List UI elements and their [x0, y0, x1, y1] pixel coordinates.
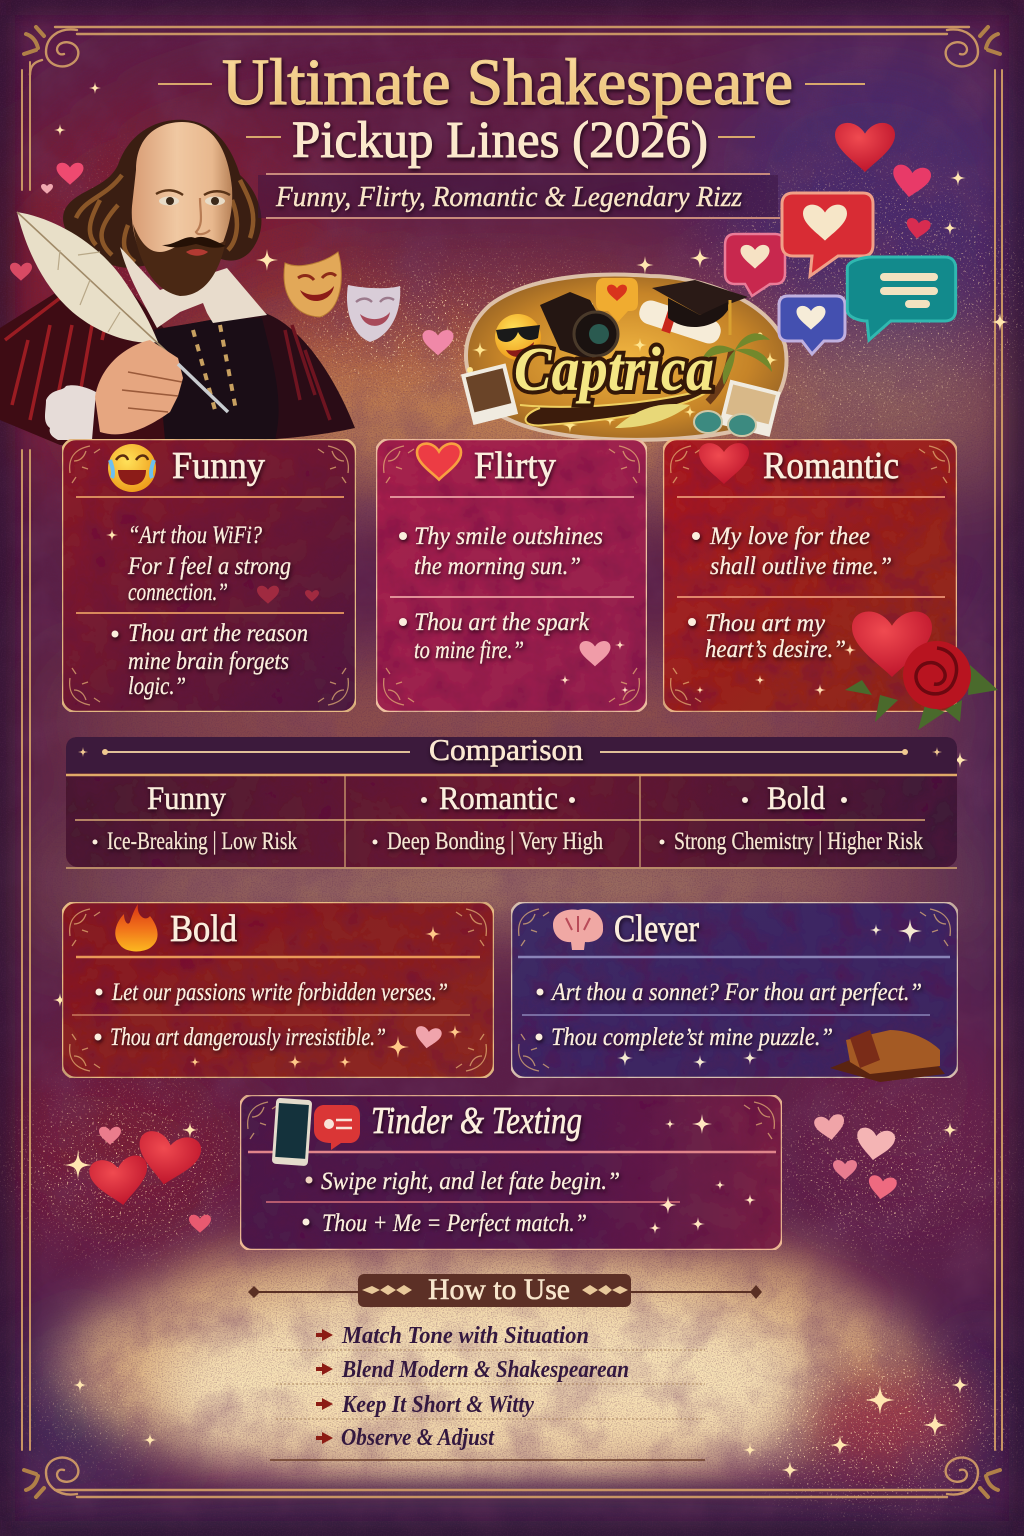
icon: teal text bubble — [847, 257, 956, 340]
panel: comparison — [66, 732, 957, 868]
subtitle banner — [258, 174, 780, 218]
text: funny lines — [112, 522, 308, 700]
corner: bottom right — [946, 1458, 1000, 1497]
icon: red chat bubble — [314, 1105, 360, 1150]
icon: laughing emoji — [108, 444, 156, 492]
text: bold lines — [94, 979, 448, 1051]
title: Ultimate Shakespeare — [222, 46, 793, 119]
table column: romantic: Romantic — [439, 781, 558, 817]
corner: bottom left — [24, 1458, 78, 1497]
icon: diploma — [636, 296, 724, 348]
icon: palm tree — [700, 333, 772, 402]
text: flirty lines — [399, 523, 603, 664]
heading: tinder and texting: Tinder & Texting — [371, 1100, 582, 1142]
icon: sunglasses — [694, 411, 756, 436]
pen nib — [178, 364, 228, 412]
table column: romantic: Deep Bonding | Very High — [387, 828, 603, 855]
text: funny lines: “Art thou WiFi? — [128, 522, 262, 549]
collar — [120, 247, 267, 328]
icon: red heart bubble — [782, 193, 873, 276]
tip 4: Observe & Adjust — [341, 1425, 495, 1451]
text: funny lines: Thou art the reason — [128, 620, 308, 647]
icon: small hearts left — [10, 163, 84, 281]
tip 1: Match Tone with Situation — [341, 1323, 589, 1349]
chat icons and hearts — [725, 123, 956, 354]
beard — [133, 224, 226, 296]
icon: heart and rose — [845, 612, 998, 730]
icon: large heart — [835, 123, 895, 172]
panel: clever — [511, 902, 958, 1082]
text: bold lines: Let our passions write forbidden verses.” — [111, 979, 448, 1006]
text: funny lines: connection.” — [128, 579, 228, 606]
eyes and nose — [156, 190, 230, 234]
text: flirty lines: Thou art the spark — [414, 609, 590, 636]
icon: blue heart bubble — [779, 296, 845, 354]
heading: funny: Funny — [172, 445, 265, 487]
table column: funny: Funny — [147, 781, 226, 817]
heading: how to use: How to Use — [428, 1273, 570, 1306]
icon: medium heart — [890, 164, 932, 200]
text: funny lines: logic.” — [128, 673, 186, 700]
icon: flame — [115, 904, 158, 951]
how to use banner — [248, 1273, 762, 1307]
portrait: William Shakespeare with quill — [0, 120, 355, 445]
logo glitter — [467, 299, 778, 433]
icon: red heart — [699, 443, 749, 484]
icon: photo left — [461, 363, 518, 425]
panel: tinder and texting — [240, 1095, 782, 1250]
title — [158, 46, 865, 169]
table column: bold — [660, 781, 923, 855]
panel: flirty — [376, 439, 647, 712]
icon: theatre masks — [284, 252, 400, 342]
text: tinder lines: Thou + Me = Perfect match.” — [322, 1210, 587, 1237]
icon: pale heart — [414, 1025, 442, 1050]
moustache and lips — [162, 237, 226, 248]
subtitle banner: Funny, Flirty, Romantic & Legendary Rizz — [275, 182, 742, 213]
text: bold lines: Thou art dangerously irresistible.” — [110, 1024, 386, 1051]
text: funny lines: For I feel a strong — [127, 553, 291, 580]
left shoulder — [0, 285, 170, 445]
text: clever lines: Art thou a sonnet? For thou art perfect.” — [550, 979, 922, 1006]
right shoulder — [150, 312, 355, 442]
icon: pink heart near logo — [422, 330, 454, 355]
tip 2: Blend Modern & Shakespearean — [341, 1357, 629, 1383]
sleeve ruffle — [45, 385, 96, 440]
table column: bold: Bold — [767, 781, 825, 817]
panel: funny — [62, 439, 356, 712]
icon: graduation cap — [652, 280, 748, 335]
table column: bold: Strong Chemistry | Higher Risk — [674, 828, 923, 855]
dark doublet — [155, 318, 279, 440]
text: tinder lines: Swipe right, and let fate begin.” — [321, 1168, 620, 1195]
text: clever lines — [536, 979, 922, 1051]
text: flirty lines: Thy smile outshines — [414, 523, 603, 550]
table column: funny — [92, 781, 297, 855]
heading: flirty: Flirty — [474, 445, 556, 487]
icon: brain — [553, 909, 603, 950]
list: how to use tips — [270, 1323, 705, 1460]
corner: top left — [24, 27, 78, 75]
heading: comparison: Comparison — [429, 732, 583, 767]
icon: smartphone — [272, 1098, 312, 1166]
corner: top right — [946, 27, 1000, 66]
text: romantic lines: Thou art my — [705, 610, 826, 637]
heading: bold: Bold — [170, 908, 237, 950]
icon: pink heart bubble — [725, 234, 785, 296]
table column: romantic — [372, 781, 603, 855]
hair — [63, 120, 261, 268]
text: romantic lines: heart’s desire.” — [705, 636, 846, 663]
icon: camera — [540, 292, 618, 360]
icon: photo right — [719, 380, 781, 437]
icon: red hearts left of tinder panel — [88, 1127, 211, 1233]
logo wordmark: Captrica — [514, 336, 714, 404]
panel: bold — [62, 902, 494, 1078]
heading: romantic: Romantic — [763, 445, 899, 487]
text: clever lines: Thou complete’st mine puzzle.” — [551, 1024, 833, 1051]
title: Pickup Lines (2026) — [292, 112, 708, 169]
text: romantic lines — [688, 523, 892, 663]
face — [132, 122, 232, 282]
icon: small heart — [905, 217, 931, 240]
text: flirty lines: to mine fire.” — [414, 637, 524, 664]
icon: heart — [417, 444, 461, 480]
hand — [95, 340, 183, 434]
text: romantic lines: shall outlive time.” — [710, 553, 892, 580]
icon: pale heart — [580, 641, 610, 666]
icon: pale hearts right of tinder panel — [813, 1113, 897, 1201]
logo: Captrica — [461, 275, 787, 440]
icon: yellow heart bubble — [596, 278, 638, 322]
text: funny lines: mine brain forgets — [128, 648, 289, 675]
table column: funny: Ice-Breaking | Low Risk — [107, 828, 297, 855]
tip 3: Keep It Short & Witty — [341, 1392, 534, 1418]
icon: sunglasses emoji — [495, 314, 541, 360]
text: flirty lines: the morning sun.” — [414, 553, 581, 580]
text: tinder lines — [302, 1168, 620, 1237]
quill feather — [17, 212, 158, 343]
heading: clever: Clever — [614, 908, 699, 950]
logo blob — [466, 275, 787, 440]
icon: book — [830, 1030, 945, 1082]
icon: feather — [615, 404, 690, 428]
panel: romantic — [663, 439, 998, 730]
logo swoosh — [520, 388, 712, 425]
text: romantic lines: My love for thee — [709, 523, 870, 550]
